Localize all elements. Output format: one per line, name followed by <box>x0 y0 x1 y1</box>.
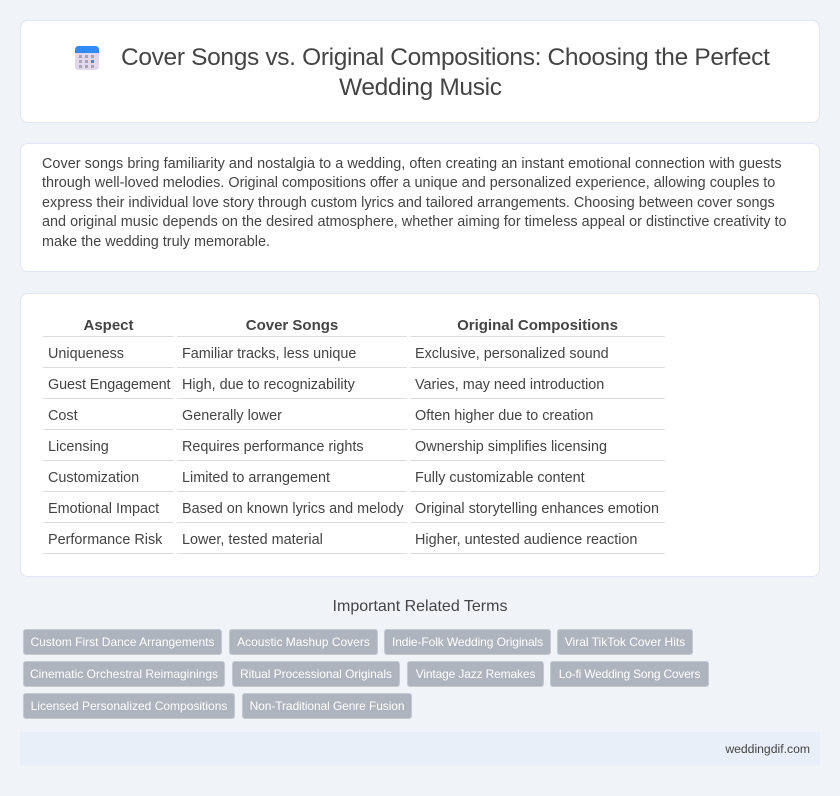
row: Guest Engagement: Varies, may need introduction <box>415 377 604 393</box>
row: Licensing: Licensing <box>48 439 109 455</box>
description text <box>42 156 787 250</box>
tag: Indie-Folk Wedding Originals <box>392 635 543 649</box>
tag <box>23 693 235 719</box>
tag: Lo-fi Wedding Song Covers <box>559 667 700 681</box>
row: Cost: Cost <box>48 408 78 424</box>
tag: Vintage Jazz Remakes <box>416 667 535 681</box>
row: Cost: Generally lower <box>182 408 282 424</box>
tag: Non-Traditional Genre Fusion <box>250 699 404 713</box>
row: Emotional Impact <box>48 501 659 517</box>
panel: comparison table <box>20 293 820 577</box>
tag: Cinematic Orchestral Reimaginings <box>30 667 218 681</box>
table header: Cover Songs <box>246 317 338 334</box>
related term tags <box>23 629 709 719</box>
row: Customization: Fully customizable content <box>415 470 585 486</box>
row: Guest Engagement: High, due to recognizability <box>182 377 355 393</box>
table header: Original Compositions <box>457 317 618 334</box>
description text: express their individual love story through custom lyrics and tailored arrangements. Choosing between cover songs <box>42 195 775 211</box>
row: Customization: Limited to arrangement <box>182 470 330 486</box>
row: Emotional Impact: Based on known lyrics and melody <box>182 501 404 517</box>
row: Performance Risk: Performance Risk <box>48 532 162 548</box>
table header <box>83 317 618 334</box>
row: Licensing: Requires performance rights <box>182 439 364 455</box>
title: Wedding Music <box>339 74 502 101</box>
tag: Viral TikTok Cover Hits <box>565 635 685 649</box>
description text: and original music depends on the desired atmosphere, whether aiming for timeless appeal or distinctive creativity to <box>42 214 787 230</box>
tag <box>23 629 222 655</box>
panel: title header <box>20 20 820 123</box>
tag <box>550 661 709 687</box>
row: Performance Risk: Lower, tested material <box>182 532 323 548</box>
row: Performance Risk: Higher, untested audience reaction <box>415 532 637 548</box>
row: Uniqueness: Familiar tracks, less unique <box>182 346 356 362</box>
tag <box>384 629 551 655</box>
heading: important related terms: Important Related Terms <box>333 598 507 615</box>
row: Customization: Customization <box>48 470 139 486</box>
row: Cost <box>48 408 593 424</box>
table header: Aspect <box>83 317 134 334</box>
tag <box>232 661 400 687</box>
title <box>121 44 770 101</box>
footer <box>20 732 820 766</box>
tag <box>557 629 693 655</box>
row: Performance Risk <box>48 532 637 548</box>
row: Guest Engagement: Guest Engagement <box>48 377 170 393</box>
description text: through well-loved melodies. Original compositions offer a unique and personalized experience, allowing couples to <box>42 175 775 191</box>
tag <box>23 661 225 687</box>
row: Emotional Impact: Emotional Impact <box>48 501 159 517</box>
tag: Ritual Processional Originals <box>240 667 392 681</box>
icon: calendar <box>75 46 99 70</box>
row: Uniqueness: Uniqueness <box>48 346 124 362</box>
title: Cover Songs vs. Original Compositions: Choosing the Perfect <box>121 44 770 71</box>
tag <box>242 693 412 719</box>
row: Guest Engagement <box>48 377 604 393</box>
description text: Cover songs bring familiarity and nostalgia to a wedding, often creating an instant emotional connection with guests <box>42 156 782 172</box>
row: Emotional Impact: Original storytelling enhances emotion <box>415 501 659 517</box>
description text: make the wedding truly memorable. <box>42 234 270 250</box>
tag: Licensed Personalized Compositions <box>31 699 227 713</box>
footer site name: weddingdif.com <box>725 742 810 756</box>
row: Licensing: Ownership simplifies licensing <box>415 439 607 455</box>
tag <box>407 661 544 687</box>
row: Uniqueness: Exclusive, personalized sound <box>415 346 609 362</box>
tag: Acoustic Mashup Covers <box>237 635 370 649</box>
tag: Custom First Dance Arrangements <box>30 635 215 649</box>
row: Uniqueness <box>48 346 609 362</box>
row: Cost: Often higher due to creation <box>415 408 593 424</box>
panel: description <box>20 143 820 272</box>
row: Licensing <box>48 439 607 455</box>
tag <box>229 629 378 655</box>
row: Customization <box>48 470 585 486</box>
